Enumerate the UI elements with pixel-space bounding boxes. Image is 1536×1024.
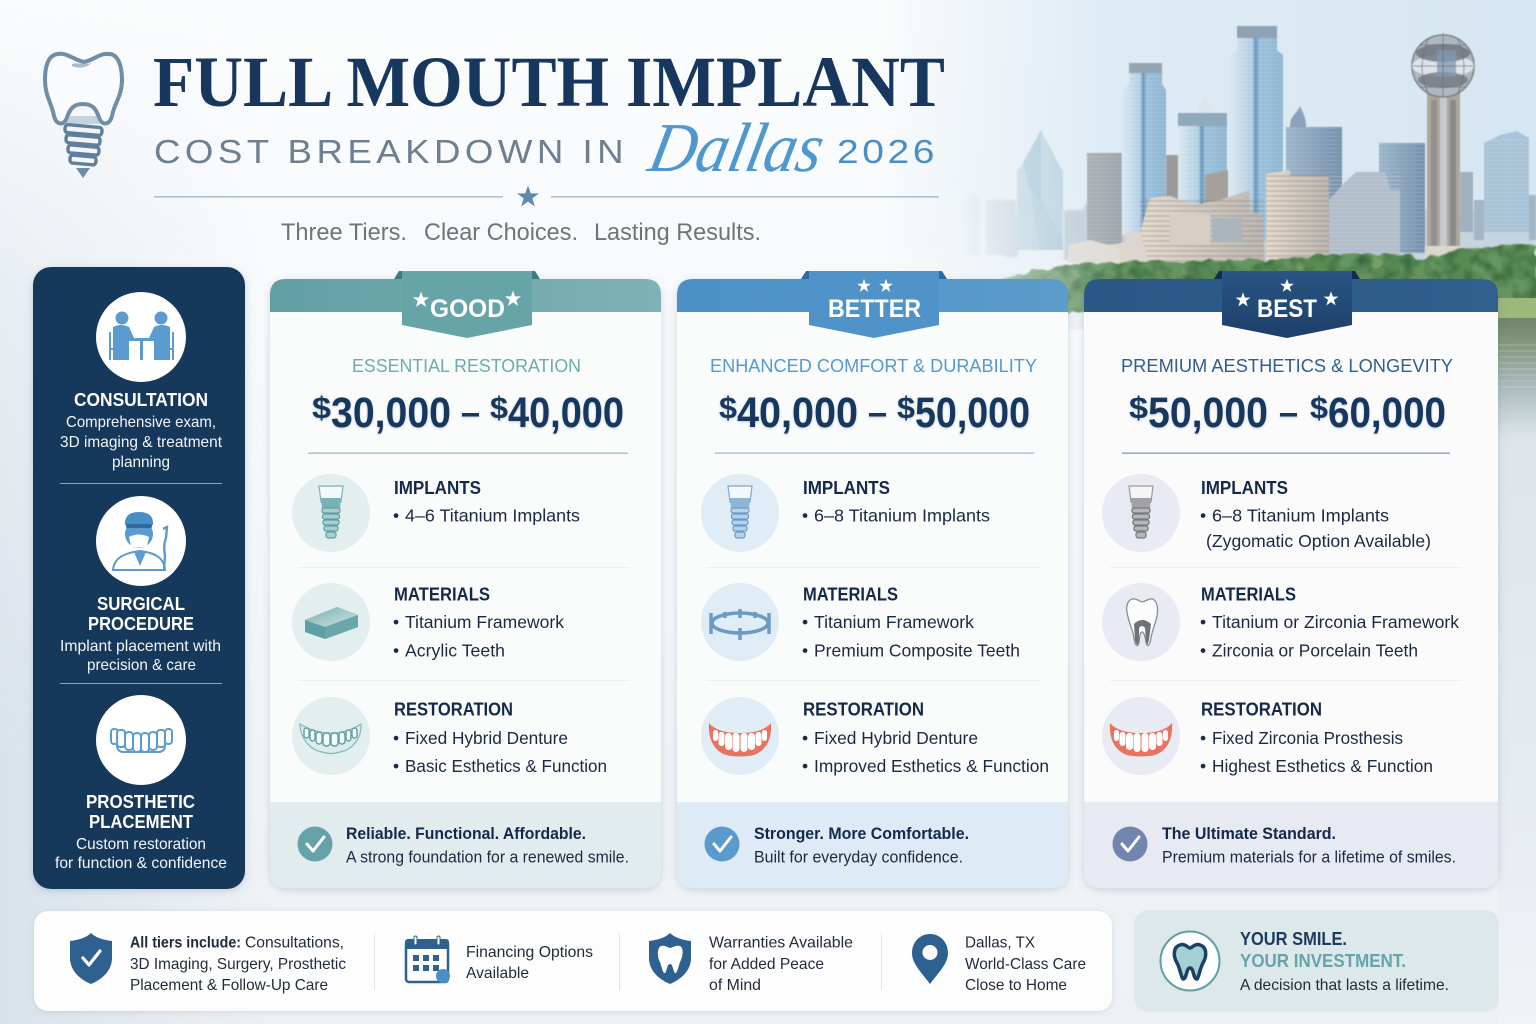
tree line [965, 244, 1536, 312]
row: restoration: • [802, 756, 808, 776]
tier subtitle: PREMIUM AESTHETICS & LONGEVITY [1121, 356, 1453, 376]
price range [312, 389, 624, 437]
header bar [270, 279, 661, 312]
row: implants: IMPLANTS [803, 478, 890, 498]
price range: $ [719, 390, 737, 425]
ribbon: BEST [1214, 271, 1360, 338]
price range [719, 389, 1030, 437]
footer callout: The Ultimate Standard. [1162, 825, 1336, 843]
row: restoration: Improved Esthetics & Function [814, 756, 1049, 776]
panel: better tier [677, 271, 1068, 888]
icon: clear denture [300, 724, 361, 754]
item: all tiers include: Consultations, [245, 934, 344, 952]
icon: zirconia crown tooth [1127, 599, 1158, 645]
ribbon: BETTER [801, 271, 947, 338]
price range: 60,000 [1328, 389, 1446, 437]
step: prosthetic placement: PROSTHETIC [86, 792, 195, 812]
beige foreground buildings [1068, 170, 1400, 266]
lake and shoreline [1498, 298, 1536, 1024]
row: materials: Titanium Framework [405, 612, 564, 632]
icon: titanium framework [711, 609, 769, 640]
row: materials [701, 583, 1020, 661]
Fountain Place diamond tower [1017, 130, 1063, 250]
item: warranties: for Added Peace [709, 956, 824, 973]
icon: surgeon with handpiece [113, 512, 167, 570]
price range: $ [490, 390, 508, 425]
row: materials: • [802, 640, 808, 660]
row: materials [292, 583, 564, 661]
step: consultation: planning [112, 454, 170, 471]
item: financing [405, 936, 593, 983]
divider with star [154, 186, 939, 206]
Dallas skyline photo illustration [960, 26, 1536, 1024]
row: restoration: • [1200, 756, 1206, 776]
row: materials: Titanium or Zirconia Framework [1212, 612, 1459, 632]
step: consultation: Comprehensive exam, [66, 414, 216, 431]
item: warranties [649, 933, 853, 994]
ribbon: BEST: BEST [1257, 295, 1317, 323]
row: implants [1102, 474, 1431, 552]
item: financing: Available [466, 965, 529, 982]
row: implants: • [393, 506, 399, 526]
row: implants: IMPLANTS [1201, 478, 1288, 498]
row: restoration: Fixed Hybrid Denture [405, 728, 568, 748]
mid-rise towers [1087, 95, 1536, 253]
tallest glass tower [1230, 26, 1283, 240]
row: materials: • [802, 612, 808, 632]
step: prosthetic placement [55, 695, 227, 872]
row: materials: Titanium Framework [814, 612, 974, 632]
ribbon: GOOD: GOOD [430, 295, 505, 323]
tagline [281, 219, 761, 246]
price range: 40,000 [737, 389, 858, 437]
item: all tiers include: 3D Imaging, Surgery, Prosthetic [130, 956, 346, 973]
row: restoration: • [1200, 728, 1206, 748]
panel: your smile callout: A decision that lasts a lifetime. [1240, 977, 1449, 994]
icon: titanium block [305, 607, 358, 639]
header bar [677, 279, 1068, 312]
header bar [1084, 279, 1498, 312]
icon: shield tooth [649, 933, 691, 984]
item: location: World-Class Care [965, 956, 1086, 973]
row: restoration: RESTORATION [394, 700, 513, 720]
price range: 50,000 [915, 389, 1030, 437]
item: all tiers include [70, 933, 346, 994]
row: materials: • [1200, 612, 1206, 632]
footer callout [1084, 802, 1498, 888]
item: location: Dallas, TX [965, 934, 1035, 952]
icon: porcelain denture [709, 723, 771, 756]
step: surgical procedure: SURGICAL [97, 594, 185, 614]
item: all tiers include: Placement & Follow-Up Care [130, 977, 328, 994]
tagline: Lasting Results. [594, 219, 761, 246]
panel: your smile callout: YOUR SMILE. [1240, 929, 1347, 949]
row: implants [292, 474, 580, 552]
price range [1129, 389, 1446, 437]
price range: $ [897, 390, 915, 425]
row: restoration: Basic Esthetics & Function [405, 756, 607, 776]
icon: consultation people at table [110, 312, 173, 360]
tier subtitle: ENHANCED COMFORT & DURABILITY [710, 356, 1037, 376]
row: restoration: RESTORATION [1201, 700, 1322, 720]
price range: $ [1310, 390, 1328, 425]
row: restoration [701, 697, 1049, 776]
icon: zirconia prosthesis [1110, 723, 1172, 756]
footer callout: A strong foundation for a renewed smile. [346, 848, 629, 866]
tagline: Clear Choices. [424, 219, 578, 246]
price range: 50,000 [1148, 389, 1268, 437]
step: prosthetic placement: Custom restoration [76, 836, 206, 853]
row: restoration: Fixed Zirconia Prosthesis [1212, 728, 1403, 748]
row: materials: MATERIALS [803, 584, 898, 604]
row: restoration: • [802, 728, 808, 748]
row: materials: • [1200, 640, 1206, 660]
panel: your smile callout: YOUR INVESTMENT. [1240, 951, 1406, 971]
footer callout: Reliable. Functional. Affordable. [346, 825, 586, 843]
step: surgical procedure [60, 496, 221, 674]
row: restoration [292, 697, 607, 776]
item: warranties: of Mind [709, 977, 761, 994]
panel: process sidebar [33, 267, 245, 889]
icon: dental arch outline [111, 729, 172, 752]
panel: your smile callout [1134, 910, 1499, 1012]
footer callout: Built for everyday confidence. [754, 848, 963, 866]
price range: 30,000 [331, 389, 451, 437]
step: consultation: CONSULTATION [74, 390, 208, 410]
row: implants: • [802, 506, 808, 526]
icon: calendar [405, 936, 450, 983]
row: materials: • [393, 640, 399, 660]
icon: implant [319, 486, 343, 538]
footer callout [677, 802, 1068, 888]
row: restoration: Fixed Hybrid Denture [814, 728, 978, 748]
row: materials [1102, 583, 1459, 661]
ribbon: GOOD [394, 271, 540, 338]
step: prosthetic placement: PLACEMENT [89, 812, 193, 832]
row: materials: • [393, 612, 399, 632]
row: implants [701, 474, 990, 552]
subheading: COST BREAKDOWN IN [154, 133, 628, 170]
row: restoration: Highest Esthetics & Function [1212, 756, 1433, 776]
price range: $ [1129, 390, 1148, 425]
ribbon: BETTER: BETTER [828, 295, 921, 323]
step: surgical procedure: PROCEDURE [88, 614, 194, 634]
footer callout: Premium materials for a lifetime of smiles. [1162, 848, 1456, 866]
footer callout [270, 802, 661, 888]
item: financing: Financing Options [466, 944, 593, 961]
row: materials: Zirconia or Porcelain Teeth [1212, 640, 1418, 660]
row: materials: Acrylic Teeth [405, 640, 505, 660]
heading: FULL MOUTH IMPLANT [153, 42, 945, 122]
row: implants: 6–8 Titanium Implants [814, 506, 990, 526]
row: materials: MATERIALS [394, 584, 490, 604]
title block [45, 42, 945, 246]
item: location: Close to Home [965, 977, 1067, 994]
price range: 40,000 [508, 389, 624, 437]
icon: map pin [912, 934, 948, 984]
distant faded buildings [987, 200, 1536, 262]
row: implants: • [1200, 506, 1206, 526]
row: implants: 4–6 Titanium Implants [405, 506, 580, 526]
row: restoration: • [393, 756, 399, 776]
tall glass tower [1122, 63, 1166, 235]
step: consultation [60, 292, 223, 471]
panel: best tier [1084, 271, 1498, 888]
step: surgical procedure: precision & care [87, 657, 196, 674]
row: implants: 6–8 Titanium Implants [1212, 506, 1389, 526]
item: all tiers include: All tiers include: [130, 934, 241, 952]
item: warranties: Warranties Available [709, 934, 853, 952]
row: implants: IMPLANTS [394, 478, 481, 498]
row: materials: Premium Composite Teeth [814, 640, 1020, 660]
panel: good tier [270, 271, 661, 888]
step: surgical procedure: Implant placement with [60, 638, 221, 655]
item: location [912, 934, 1086, 994]
icon: tooth implant logo [45, 54, 122, 178]
tier subtitle: ESSENTIAL RESTORATION [352, 356, 581, 376]
row: materials: MATERIALS [1201, 584, 1296, 604]
year: 2026 [837, 133, 938, 170]
footer callout: Stronger. More Comfortable. [754, 825, 969, 843]
price range: $ [312, 390, 331, 425]
script word Dallas: Dallas [642, 110, 831, 187]
panel: inclusions bar [34, 911, 1112, 1011]
icon: implant [728, 486, 752, 538]
step: prosthetic placement: for function & confidence [55, 855, 227, 872]
Reunion Tower [1412, 33, 1474, 262]
row: implants: (Zygomatic Option Available) [1206, 531, 1431, 551]
icon: implant [1129, 486, 1153, 538]
row: restoration: • [393, 728, 399, 748]
tagline: Three Tiers. [281, 219, 407, 246]
row: restoration: RESTORATION [803, 700, 924, 720]
icon: shield check [70, 933, 112, 984]
step: consultation: 3D imaging & treatment [60, 434, 223, 451]
row: restoration [1102, 697, 1433, 776]
icon: tooth badge [1160, 932, 1220, 990]
